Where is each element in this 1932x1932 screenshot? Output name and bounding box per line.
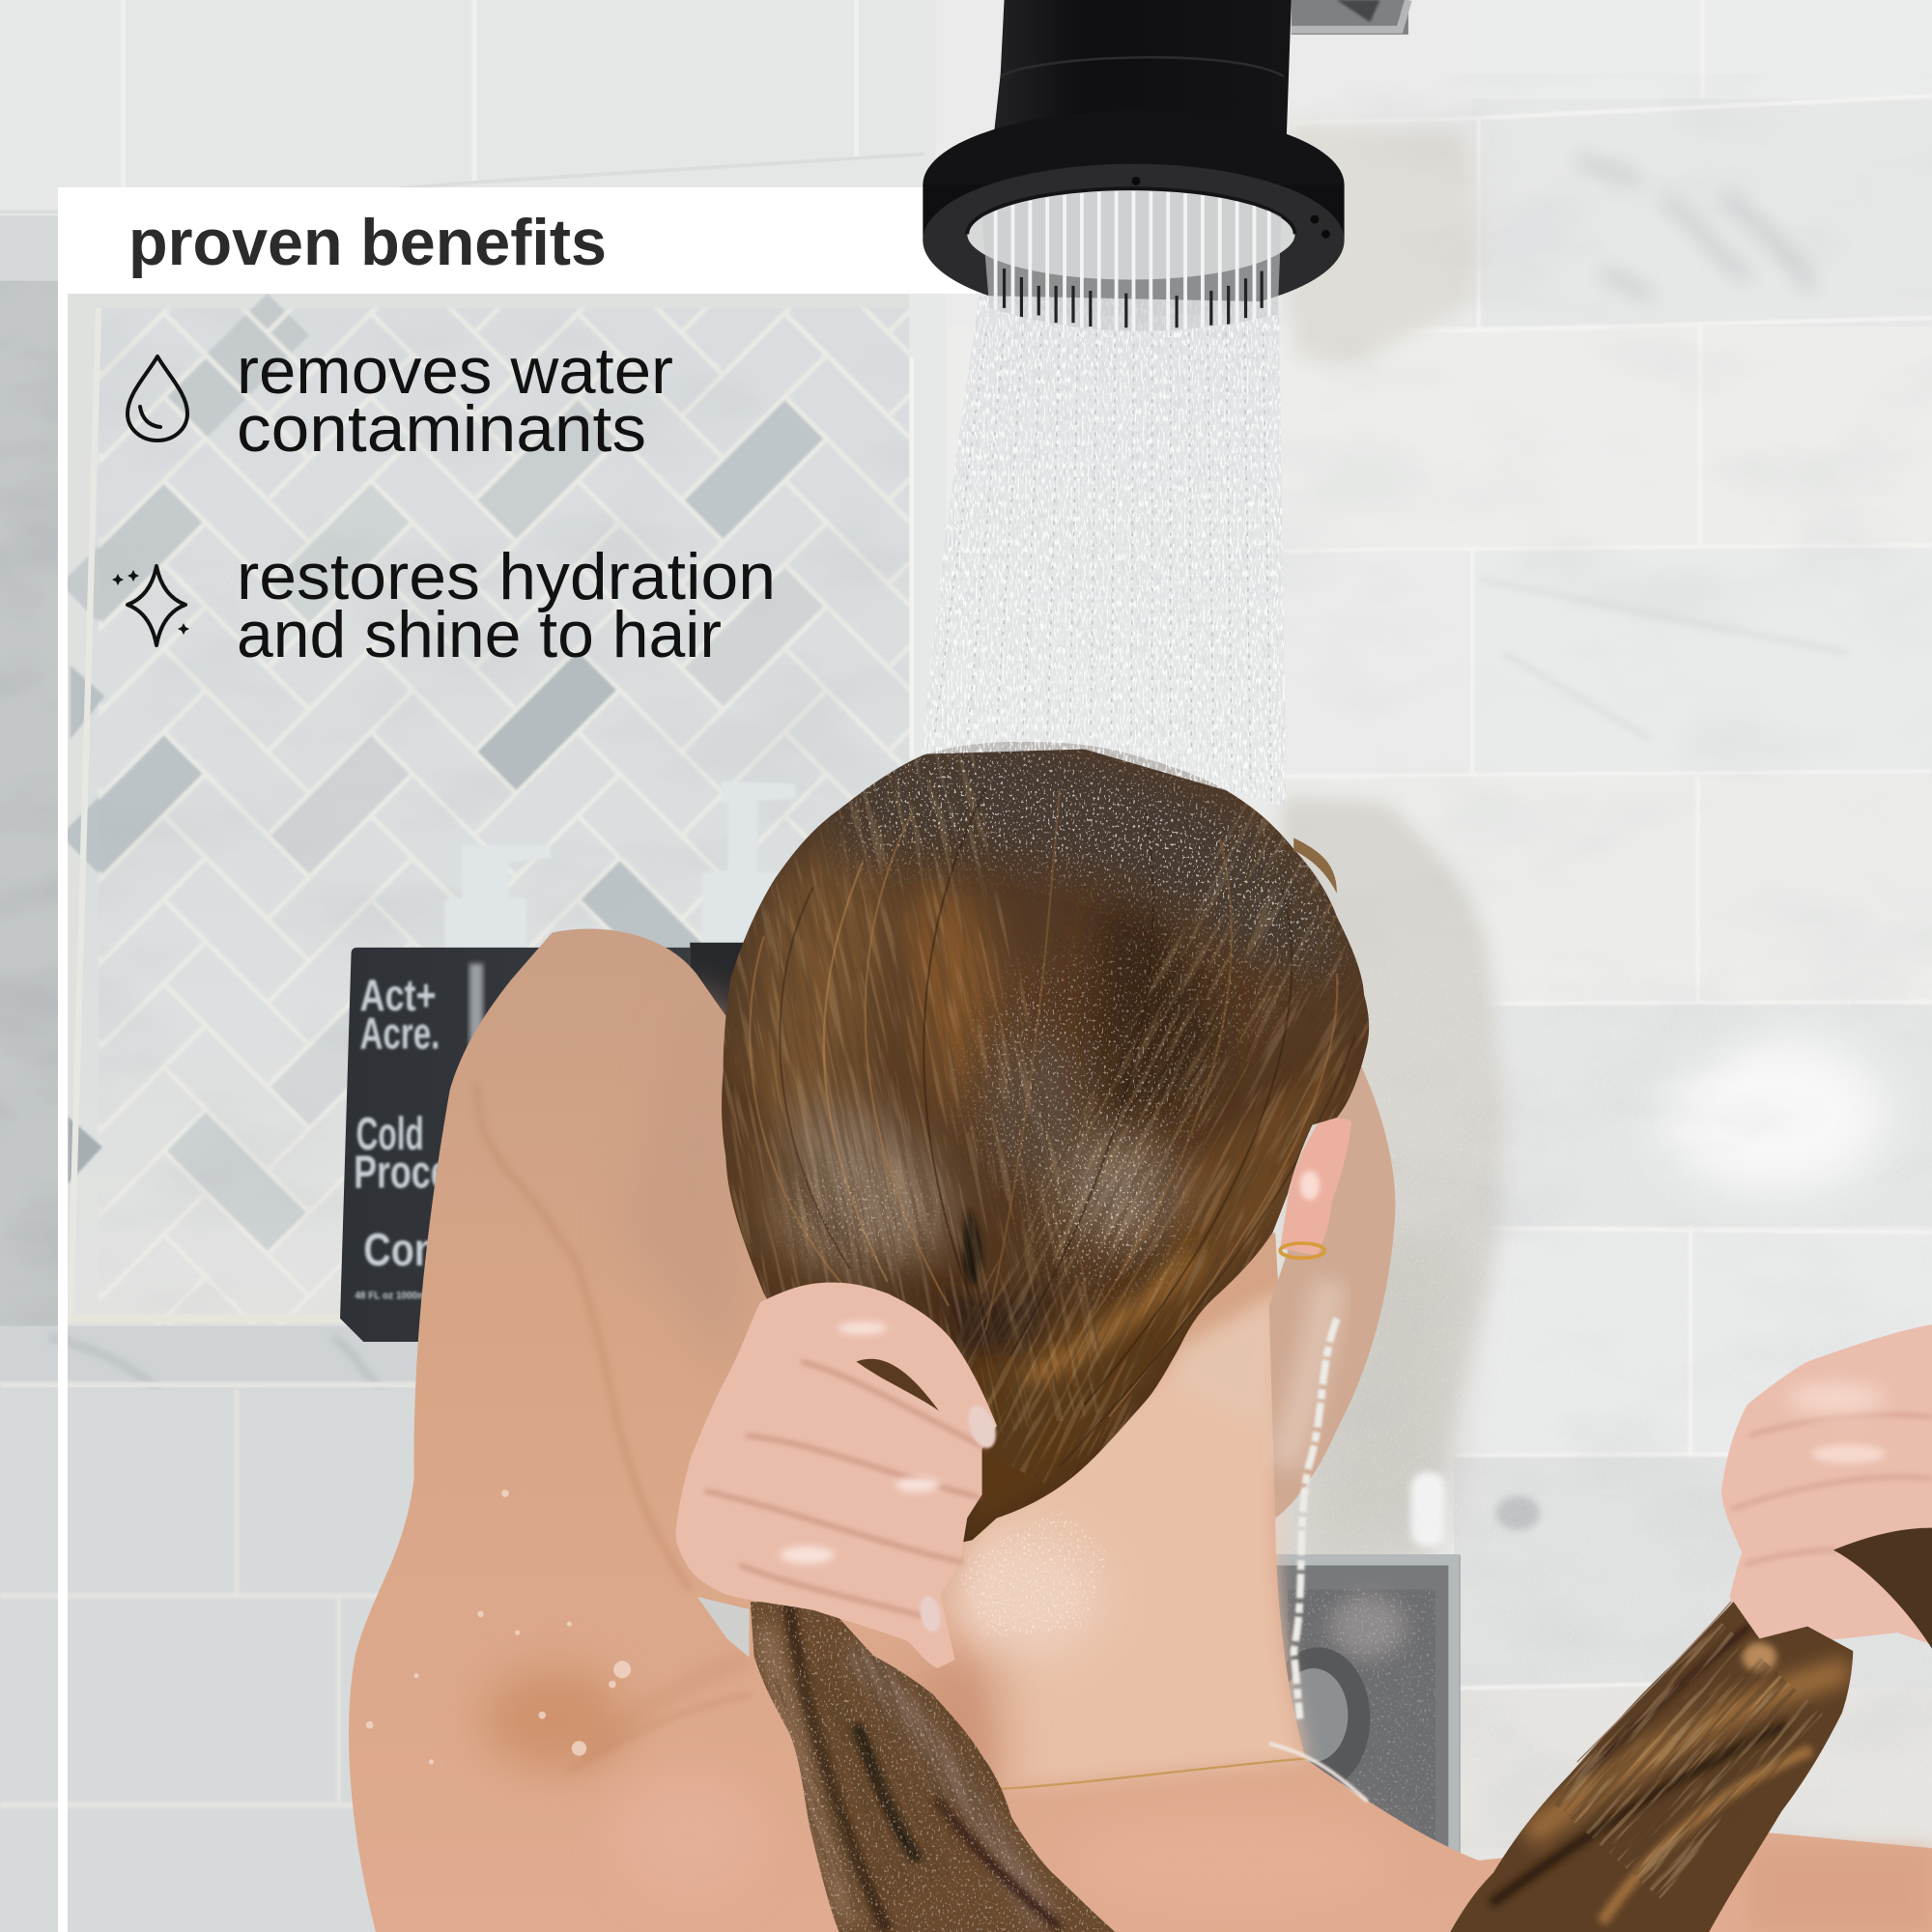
left hand holding ponytail — [675, 1283, 1001, 1668]
heading: proven benefits: proven benefits — [128, 206, 607, 279]
wet hair crown — [722, 742, 1370, 1542]
shower head cylinder — [993, 0, 1292, 142]
right bottle pump — [702, 781, 796, 944]
bottle label text: Con — [363, 1224, 438, 1276]
loose wet curl at the hairline — [1293, 838, 1337, 894]
gap between fingers showing hair — [856, 1359, 939, 1410]
bottle label text: Acre. — [359, 1008, 440, 1058]
bottle label text: Act+ — [359, 970, 437, 1020]
water jets inside the ring — [974, 179, 1288, 345]
faucet plates — [1266, 0, 1460, 1863]
arm shading and crease — [477, 985, 764, 1897]
water stream down the neck — [1293, 1319, 1337, 1719]
water sheet on shoulder — [1269, 1744, 1368, 1802]
hair strands — [750, 788, 1355, 1466]
hair strand over the hand — [1833, 1528, 1932, 1649]
benefit text: removes water contaminants — [237, 334, 673, 466]
bottle label text — [354, 970, 450, 1301]
left ponytail — [739, 1596, 1133, 1932]
benefit text: restores hydration and shine to hair: restores hydration — [237, 540, 776, 613]
flyaway hair — [1577, 1602, 1731, 1762]
streaks of droplets — [934, 332, 1271, 801]
jaw and cheek — [1269, 1054, 1395, 1518]
water droplets on the arm — [366, 1490, 631, 1765]
left bottle body — [340, 948, 690, 1342]
water droplets on hair — [770, 742, 1358, 1310]
finger lines — [705, 1361, 985, 1620]
white L-shaped panel frame — [58, 187, 985, 1932]
bottle label text: Cold — [356, 1108, 424, 1160]
right hand — [1721, 1324, 1932, 1647]
strand texture — [722, 753, 1369, 1484]
highlights on fingers — [780, 1322, 940, 1564]
fingernails — [918, 1402, 1001, 1634]
gold necklace — [998, 1758, 1309, 1789]
left bottle pump — [444, 845, 552, 950]
ear — [1280, 1118, 1351, 1256]
icon: water drop — [128, 356, 187, 440]
tile grout lines — [1282, 0, 1932, 1688]
wedge of wall under hand — [697, 1597, 750, 1658]
gold earring — [1280, 1243, 1324, 1258]
darker marble tiles — [60, 294, 827, 1254]
herringbone niche — [60, 294, 947, 1328]
falling water — [912, 179, 1293, 813]
benefit text: restores hydration and shine to hair — [237, 540, 776, 671]
lower left wall tiles — [0, 1325, 425, 1932]
bottle label text: Proce — [354, 1147, 450, 1199]
right ponytail — [1441, 1528, 1932, 1932]
right bottle body — [690, 943, 782, 1016]
neck — [970, 1293, 1306, 1789]
benefit text: removes water contaminants: removes water — [237, 334, 673, 408]
rain shower head — [912, 0, 1345, 813]
icon: sparkle — [112, 566, 189, 645]
water droplet texture — [912, 296, 1293, 813]
benefit text: restores hydration and shine to hair: and shine to hair — [237, 598, 722, 671]
benefit text: removes water contaminants: contaminants — [237, 392, 646, 466]
droplets on the lower right tiles — [1282, 961, 1932, 1824]
water sheet on the nape — [959, 1511, 1109, 1638]
woman: arm, back, neck — [349, 929, 1932, 1932]
hair colour areas — [750, 844, 889, 1257]
shampoo and conditioner bottles — [340, 781, 796, 1342]
bottle label text: 48 FL oz 1000ml — [355, 1290, 429, 1301]
shower head ring — [923, 111, 1345, 317]
